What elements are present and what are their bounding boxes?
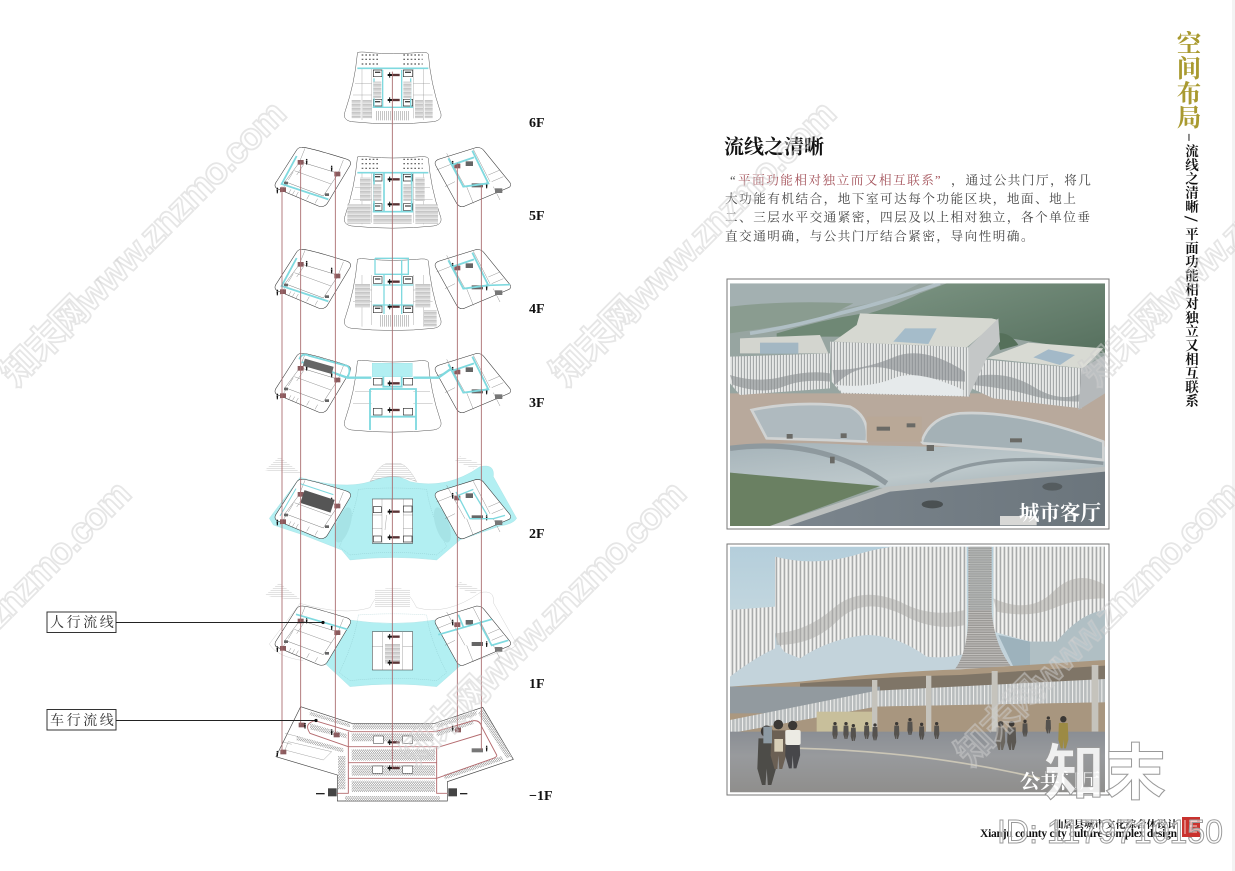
body text: ， bbox=[951, 174, 965, 188]
ID watermark: ID: 1179710150 bbox=[997, 813, 1223, 850]
floor plan: 3F bbox=[275, 353, 511, 432]
sidebar subtitle: / bbox=[1180, 215, 1202, 222]
watermarks: 知末网www.znzmo.com bbox=[0, 92, 294, 394]
floor plan: 4F bbox=[275, 249, 511, 330]
watermarks: 知末网www.znzmo.com bbox=[543, 92, 844, 394]
vertical connector lines bbox=[282, 72, 481, 768]
footer project title bbox=[980, 818, 1178, 840]
grass and road bbox=[730, 473, 880, 526]
legend: vehicle flow bbox=[47, 710, 318, 730]
body text: ” bbox=[935, 174, 942, 188]
floor labels bbox=[529, 116, 553, 804]
floor labels: 6F bbox=[529, 116, 545, 131]
floor labels: 4F bbox=[529, 302, 545, 317]
footer project title: 仙居县城市文化综合体设计 bbox=[1053, 818, 1178, 831]
body text: “ bbox=[730, 174, 737, 188]
right building bbox=[987, 343, 1103, 368]
sidebar subtitle: 平面功能相对独立又相互联系 bbox=[1183, 226, 1199, 408]
caption: 公共门厅 bbox=[1020, 770, 1100, 793]
watermarks: 知末网www.znzmo.com bbox=[393, 472, 694, 774]
logo watermark: 知末 bbox=[1044, 739, 1166, 807]
exploded floor plan stack bbox=[265, 52, 517, 801]
body text bbox=[725, 172, 1092, 244]
body text: 大功能有机结合，地下室可达每个功能区块，地面、地上 bbox=[725, 191, 1077, 207]
caption: 城市客厅 bbox=[1019, 501, 1101, 525]
sunken plaza bbox=[730, 443, 1105, 488]
floor labels: 2F bbox=[529, 527, 545, 542]
sidebar subtitle: – bbox=[1183, 134, 1198, 141]
floor plan: -1F bbox=[276, 707, 513, 801]
legend: pedestrian flow bbox=[47, 612, 325, 632]
photo: city living room aerial view bbox=[727, 279, 1109, 529]
body text: 平面功能相对独立而又相互联系 bbox=[738, 172, 935, 188]
people bbox=[832, 716, 1051, 741]
floor labels: −1F bbox=[529, 789, 553, 804]
body text: 通过公共门厅，将几 bbox=[966, 172, 1092, 188]
watermarks bbox=[0, 92, 1235, 774]
floor plan: 6F bbox=[344, 52, 441, 124]
railing bbox=[730, 679, 1105, 733]
ground bbox=[730, 732, 1105, 792]
legend: vehicle flow: 车行流线 bbox=[50, 712, 116, 729]
left building bbox=[740, 335, 828, 353]
heading: 流线之清晰 bbox=[724, 136, 824, 158]
floor plan: 1F bbox=[265, 582, 517, 687]
center building bbox=[833, 313, 998, 347]
body text: 直交通明确，与公共门厅结合紧密，导向性明确。 bbox=[725, 228, 1035, 244]
floor plan: 2F bbox=[265, 456, 517, 560]
sidebar title: 空间布局 bbox=[1177, 30, 1201, 132]
sidebar subtitle: 流线之清晰 bbox=[1183, 143, 1199, 215]
body text: 二、三层水平交通紧密，四层及以上相对独立，各个单位垂 bbox=[725, 210, 1091, 226]
floor plan: 5F bbox=[275, 147, 511, 228]
seal stamp bbox=[1182, 817, 1200, 837]
floor labels: 3F bbox=[529, 396, 545, 411]
footer project title: Xianju county city culture complex design bbox=[980, 828, 1178, 840]
floor labels: 1F bbox=[529, 677, 545, 692]
legend: pedestrian flow: 人行流线 bbox=[50, 614, 116, 631]
photo: public foyer street view bbox=[727, 544, 1109, 795]
floor labels: 5F bbox=[529, 209, 545, 224]
